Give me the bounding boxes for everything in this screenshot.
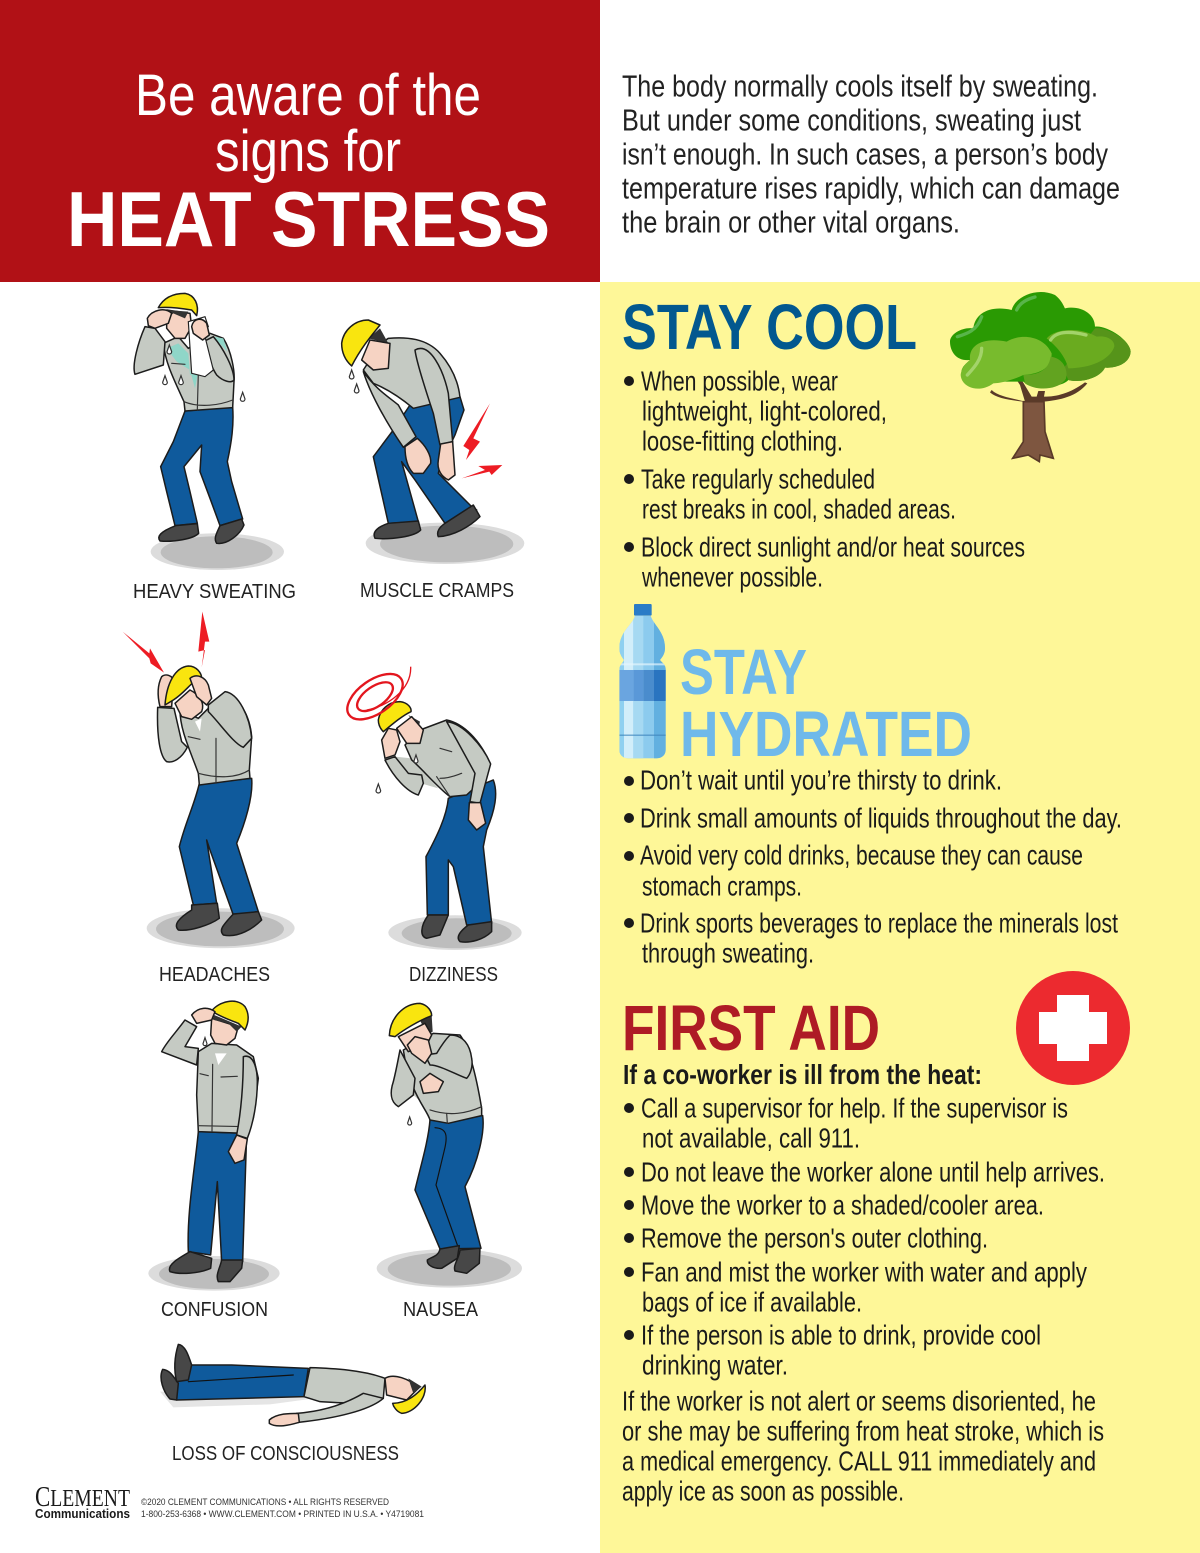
label: heavy sweating: HEAVY SWEATING <box>133 581 296 603</box>
list: first aid steps <box>624 1092 1105 1380</box>
label: headaches: HEADACHES <box>159 964 270 986</box>
panel: advice background <box>600 282 1200 1553</box>
list: stay cool tips <box>624 365 1025 592</box>
text block: introduction: But under some conditions, sweating just <box>622 102 1081 137</box>
list: stay cool tips: loose-fitting clothing. <box>642 425 843 456</box>
logo: clement communications <box>35 1482 130 1521</box>
list: first aid steps: If the person is able to drink, provide cool <box>641 1319 1041 1350</box>
heading: stay cool: STAY COOL <box>622 291 917 363</box>
text block: heat stroke warning: If the worker is not alert or seems disoriented, he <box>622 1385 1096 1416</box>
heading: stay hydrated <box>680 636 972 770</box>
list: hydration tips: stomach cramps. <box>642 870 802 901</box>
list: stay cool tips: Take regularly scheduled <box>641 463 875 494</box>
label: dizziness: DIZZINESS <box>409 964 498 986</box>
figure: muscle cramps <box>342 320 524 564</box>
panel: stay cool <box>622 291 1131 592</box>
figure: heavy sweating <box>134 293 284 570</box>
figure: headaches <box>123 612 295 948</box>
text block: introduction: The body normally cools itself by sweating. <box>622 68 1098 103</box>
list: first aid steps: bags of ice if available. <box>642 1286 862 1317</box>
list: first aid steps: Move the worker to a shaded/cooler area. <box>641 1189 1044 1220</box>
icon: tree <box>950 292 1131 462</box>
icon: red cross <box>1016 971 1130 1085</box>
list: stay cool tips: rest breaks in cool, shaded areas. <box>642 493 956 524</box>
list: hydration tips: Don’t wait until you’re thirsty to drink. <box>640 764 1002 795</box>
text block: copyright: 1-800-253-6368 • WWW.CLEMENT.COM • PRINTED IN U.S.A. • Y4719081 <box>141 1509 424 1519</box>
list: first aid steps: Fan and mist the worker with water and apply <box>641 1256 1087 1287</box>
title: signs for <box>215 119 401 184</box>
icon: pain bolts <box>462 403 502 478</box>
text block: copyright: ©2020 CLEMENT COMMUNICATIONS • ALL RIGHTS RESERVED <box>141 1497 389 1507</box>
label: confusion: CONFUSION <box>161 1299 268 1321</box>
subheading: first aid: If a co-worker is ill from the heat: <box>623 1059 982 1090</box>
figure: confusion <box>148 1001 280 1291</box>
list: first aid steps: not available, call 911. <box>642 1122 860 1153</box>
list: first aid steps: Remove the person's outer clothing. <box>641 1222 988 1253</box>
figure: loss of consciousness <box>160 1344 425 1426</box>
text block: heat stroke warning: apply ice as soon as possible. <box>622 1475 904 1506</box>
list: stay cool tips: lightweight, light-colored, <box>642 395 887 426</box>
label: loss of consciousness: LOSS OF CONSCIOUSNESS <box>172 1443 399 1465</box>
logo: clement communications: Communications <box>35 1506 130 1521</box>
figure: nausea <box>377 1003 522 1288</box>
text block: copyright <box>141 1497 424 1519</box>
panel: first aid <box>622 971 1130 1506</box>
panel: title banner <box>0 0 600 282</box>
heading: stay hydrated: HYDRATED <box>680 698 972 770</box>
text block: introduction <box>622 68 1120 239</box>
title: HEAT STRESS <box>67 175 550 263</box>
list: first aid steps: Call a supervisor for help. If the supervisor is <box>641 1092 1068 1123</box>
list: stay cool tips: Block direct sunlight and/or heat sources <box>641 531 1025 562</box>
text block: introduction: the brain or other vital organs. <box>622 204 960 239</box>
figure: dizziness <box>340 665 522 950</box>
label: muscle cramps: MUSCLE CRAMPS <box>360 580 514 602</box>
list: stay cool tips: whenever possible. <box>641 561 823 592</box>
label: nausea: NAUSEA <box>403 1299 479 1321</box>
logo: clement communications: CLEMENT <box>35 1482 130 1513</box>
panel: stay hydrated <box>617 604 1122 968</box>
list: hydration tips: through sweating. <box>642 937 814 968</box>
title <box>67 63 550 263</box>
icon: dizzy swirl <box>340 665 411 728</box>
title: Be aware of the <box>135 63 481 128</box>
heading: stay hydrated: STAY <box>680 636 807 708</box>
heading: first aid: FIRST AID <box>622 992 880 1064</box>
icon: pain bolts <box>123 612 209 673</box>
icon: water bottle <box>619 604 666 758</box>
list: first aid steps: drinking water. <box>642 1349 788 1380</box>
list: stay cool tips: When possible, wear <box>641 365 838 396</box>
list: hydration tips <box>624 764 1122 968</box>
text block: heat stroke warning <box>622 1385 1104 1506</box>
